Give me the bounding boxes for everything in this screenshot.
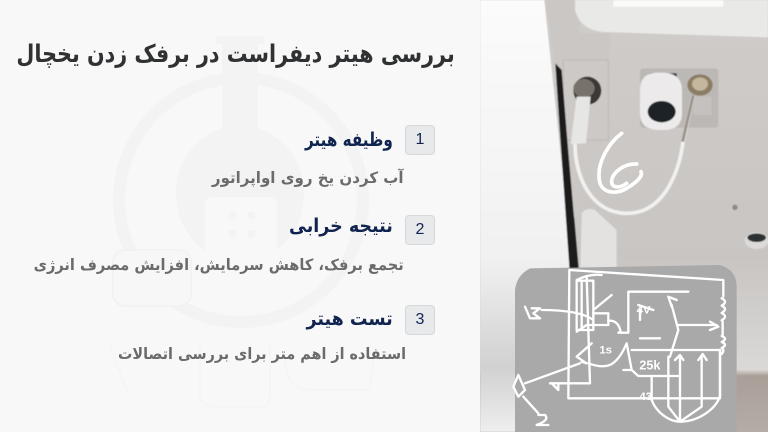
- title: بررسی هیتر دیفراست در برفک زدن یخچال: [17, 39, 455, 68]
- lower stub: [580, 209, 617, 287]
- wire: [575, 95, 693, 213]
- badge 2: [405, 215, 435, 245]
- description 3: استفاده از اهم متر برای بررسی اتصالات: [118, 345, 406, 363]
- wiring diagram sketch: [513, 265, 737, 432]
- description 1: آب کردن یخ روی اواپراتور: [212, 169, 404, 187]
- heading 1: وظیفه هیتر: [305, 129, 393, 151]
- badge 3: [405, 305, 435, 335]
- item 3: [118, 305, 435, 363]
- sketch label 4v: 4V: [637, 304, 651, 316]
- sketch panel: [515, 265, 737, 432]
- item 1: [211, 125, 435, 187]
- badge 2: 2: [416, 221, 424, 238]
- badge 3: 3: [416, 311, 424, 328]
- handwritten number on wire: [599, 133, 641, 192]
- sketch label 4: 43: [639, 391, 652, 403]
- item 2: [34, 215, 435, 274]
- description 2: تجمع برفک، کاهش سرمایش، افزایش مصرف انرژی: [34, 256, 404, 274]
- sketch label 1s: 1s: [599, 344, 612, 356]
- watermark logo: [0, 0, 480, 432]
- photo: defrost heater connector: [480, 0, 768, 432]
- socket plate: [640, 68, 718, 128]
- badge 1: 1: [416, 131, 424, 148]
- sketch labels: 25k: [639, 358, 661, 372]
- left panel: [480, 0, 573, 432]
- bottom right hole: [745, 232, 768, 249]
- heading 2: نتیجه خرابی: [289, 215, 393, 237]
- upper shelf: [575, 0, 768, 37]
- back plate: [545, 0, 610, 217]
- badge 1: [405, 125, 435, 155]
- left socket: [573, 77, 601, 105]
- heading 3: تست هیتر: [307, 308, 393, 330]
